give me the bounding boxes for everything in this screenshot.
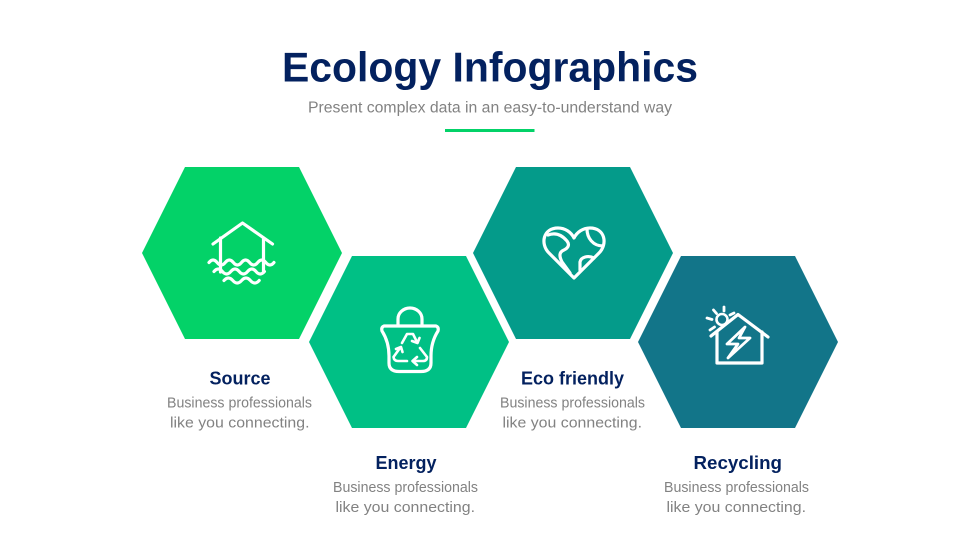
- text: source description: Business professionals: [167, 396, 312, 412]
- panel: recycling: [638, 256, 838, 516]
- icon: solar house: [707, 307, 768, 363]
- heading: source: Source: [210, 368, 270, 388]
- text: source description: like you connecting.: [170, 414, 310, 432]
- heading: energy: Energy: [376, 453, 436, 473]
- hexagon: energy: [309, 256, 509, 428]
- text: recycling description: Business professionals: [664, 480, 809, 496]
- icon: house over water: [209, 223, 274, 283]
- text: eco friendly description: like you connecting.: [502, 414, 642, 432]
- text: energy description: Business professionals: [333, 480, 478, 496]
- hexagon: recycling: [638, 256, 838, 428]
- text: energy description: like you connecting.: [336, 499, 475, 516]
- text: recycling description: like you connecting.: [666, 499, 806, 516]
- title: Ecology Infographics: [282, 44, 698, 90]
- text: source description: [167, 396, 312, 432]
- text: energy description: [333, 480, 478, 516]
- panel: energy: [309, 256, 509, 516]
- panel: source: [142, 167, 342, 432]
- icon: recycling bag: [382, 308, 438, 372]
- heading: eco friendly: Eco friendly: [521, 368, 624, 388]
- subtitle: Present complex data in an easy-to-understand way: [308, 100, 672, 116]
- panel: eco friendly: [473, 167, 673, 432]
- icon: earth heart: [544, 228, 604, 278]
- hexagon: source: [142, 167, 342, 339]
- hexagon: eco friendly: [473, 167, 673, 339]
- text: eco friendly description: [500, 396, 645, 432]
- text: recycling description: [664, 480, 809, 516]
- heading: recycling: Recycling: [694, 453, 782, 473]
- text: eco friendly description: Business professionals: [500, 396, 645, 412]
- title underline: [445, 129, 534, 132]
